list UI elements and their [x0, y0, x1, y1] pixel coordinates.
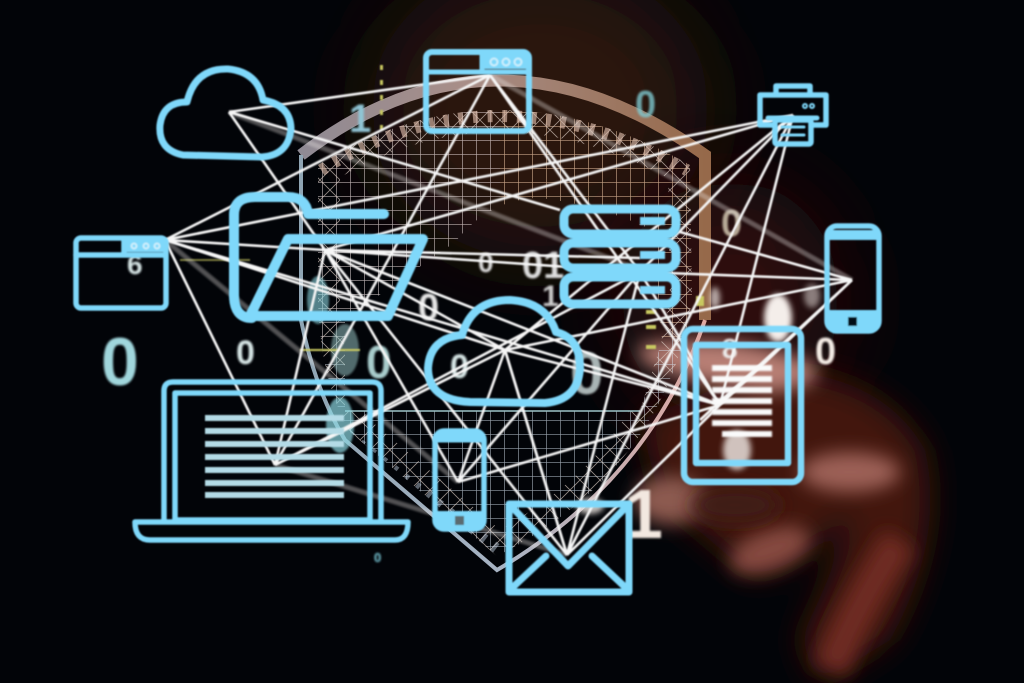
binary digits: 0	[570, 340, 603, 407]
binary digits: 01	[522, 245, 564, 287]
binary digits: 8	[722, 333, 738, 364]
icon: browser window top	[426, 52, 529, 131]
icon: folder	[234, 197, 423, 318]
binary digits: 0	[815, 331, 836, 373]
binary digits: 0	[418, 287, 439, 329]
icon: phone right	[827, 226, 879, 331]
binary digits: 0	[101, 324, 139, 400]
shield inner lattice	[318, 110, 692, 555]
binary digits: 6	[127, 249, 143, 280]
binary digits: 0	[635, 84, 656, 126]
icon: tablet	[684, 329, 801, 482]
binary digits: 1	[349, 97, 371, 141]
yellow data specks	[180, 65, 704, 351]
icon: printer	[760, 86, 826, 144]
binary digits: 0	[366, 336, 392, 388]
icon: cloud center	[428, 300, 580, 403]
icon: laptop	[135, 382, 408, 540]
binary digits: 0	[478, 247, 494, 278]
blurred cyan digits	[326, 397, 354, 453]
binary digits	[101, 84, 836, 565]
icon: server stack	[564, 209, 676, 304]
blurred hand	[634, 340, 930, 683]
icon: phone bottom	[435, 431, 484, 529]
binary digits: 0	[374, 550, 381, 565]
icon: browser window left	[76, 238, 166, 308]
device icons	[76, 52, 879, 592]
binary digits: 0	[721, 203, 742, 245]
binary digits: 0	[450, 348, 469, 386]
shield outer rim	[301, 80, 705, 320]
white blurred digits near hand	[576, 284, 820, 514]
icon: cloud top left	[160, 69, 291, 157]
binary digits: 1	[542, 280, 559, 313]
binary digits: 0	[236, 334, 255, 372]
shield	[290, 70, 720, 580]
icon: envelope	[509, 504, 629, 592]
connection lines	[165, 75, 852, 555]
binary digits: 1	[624, 475, 663, 553]
blurred background glow	[370, 0, 840, 420]
faint out-of-focus lines	[165, 75, 852, 555]
